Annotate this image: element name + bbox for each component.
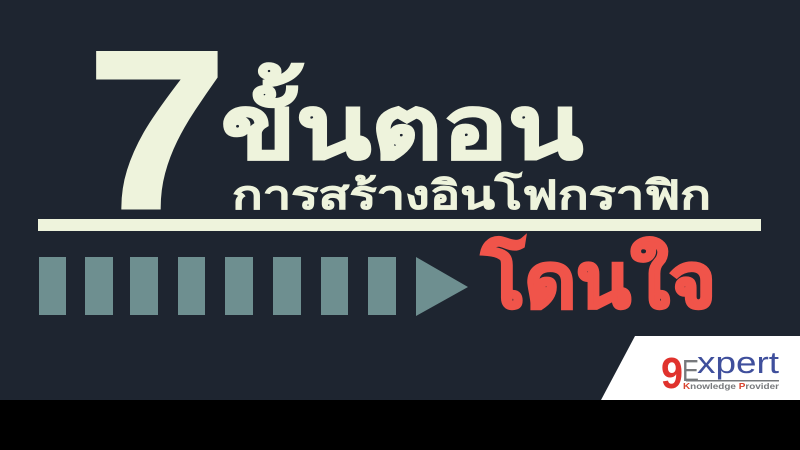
logo panel [601,336,800,400]
title: steps: ขั้นตอน [221,63,583,177]
subtitle: การสร้างอินโฟกราฟิก [232,172,711,218]
logo letter E: E [682,353,699,388]
big numeral 7: 7 [87,3,227,256]
logo background [601,336,800,400]
bottom letterbox band [0,400,800,450]
logo mark 9: 9 [661,349,683,398]
highlighted word: โดนใจ [481,236,716,324]
logo wordmark: xpert [697,345,779,380]
logo tagline: Knowledge Provider [683,381,780,391]
logo underline [686,380,779,382]
progress arrow [39,257,468,316]
divider rule [38,219,761,231]
